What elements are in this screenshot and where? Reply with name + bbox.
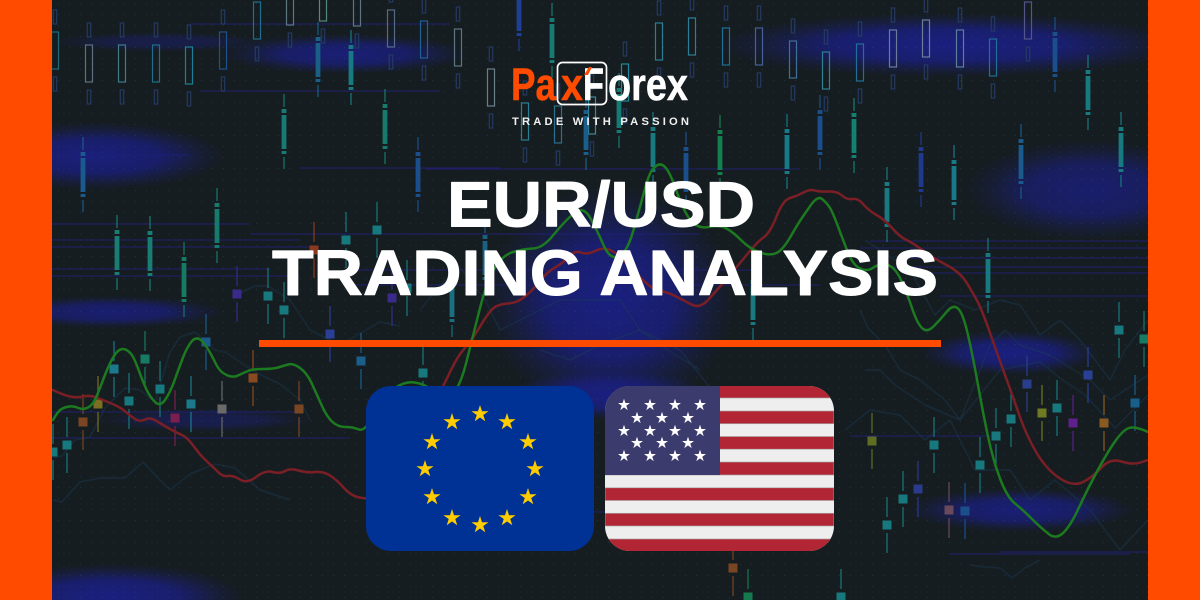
- icon: EU flag: [366, 386, 594, 551]
- logo wordmark: Forex: F: [583, 59, 604, 110]
- title: TRADING ANALYSIS: [272, 237, 938, 309]
- logo wordmark: Forex: [583, 59, 688, 110]
- chart line: green: [53, 164, 1148, 537]
- title: [272, 168, 938, 309]
- logo tagline: TRADE WITH PASSION: [512, 116, 689, 128]
- side bar: right: [1148, 0, 1200, 600]
- logo wordmark: Pax: Pa: [511, 59, 557, 110]
- chart line: red: [53, 190, 1148, 500]
- hollow candlesticks: [52, 0, 1032, 165]
- side bar: left: [0, 0, 52, 600]
- title: EUR/USD: [447, 168, 755, 240]
- logo wordmark: Pax: x: [561, 59, 583, 110]
- faint oscillator waves: [53, 240, 1148, 578]
- logo slash: [584, 67, 592, 75]
- logo: [511, 59, 689, 128]
- solid candlesticks: [81, 0, 1123, 340]
- icon: US flag: [605, 385, 834, 552]
- square markers: [48, 202, 1148, 600]
- title underline: [259, 340, 941, 347]
- logo wordmark: Forex: orex: [608, 59, 688, 110]
- logo box: [558, 62, 606, 104]
